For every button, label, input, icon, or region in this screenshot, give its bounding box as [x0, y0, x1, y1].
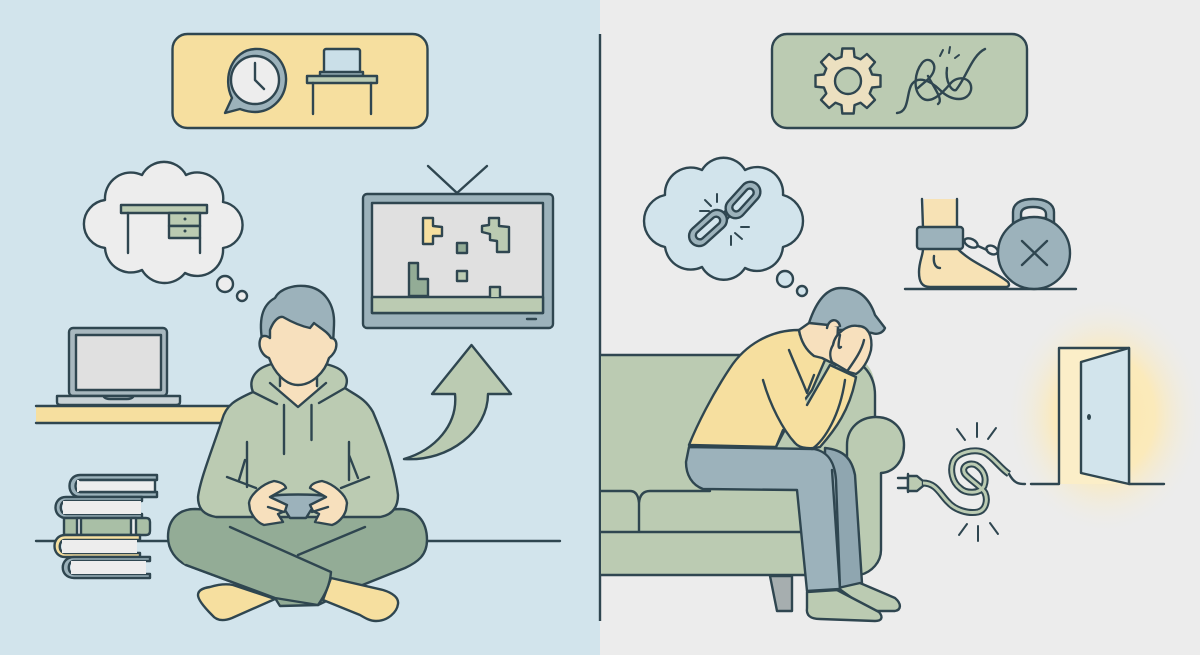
- face: [260, 317, 336, 385]
- sofa: [601, 355, 904, 611]
- icon: broken chain: [685, 178, 764, 250]
- panel: left background: [0, 0, 600, 655]
- laptop: [57, 328, 180, 405]
- sofa leg: [770, 576, 792, 611]
- panel: left scene: [36, 34, 560, 621]
- shelf: [36, 406, 231, 423]
- weight: [998, 199, 1070, 289]
- panel: right scene: [601, 34, 1200, 621]
- floor line: [36, 540, 560, 542]
- torso: [689, 330, 825, 447]
- foot: [919, 199, 1009, 287]
- back leg: [825, 448, 862, 590]
- hair: [261, 286, 334, 345]
- crossed legs: [168, 509, 427, 606]
- slumped person: [686, 288, 900, 621]
- thought cloud: desk: [84, 162, 247, 301]
- face: [799, 323, 838, 365]
- thought cloud: broken chain: [644, 158, 807, 296]
- header: gear and tangle: [772, 34, 1027, 128]
- ear: [827, 320, 840, 328]
- icon: desk in thought: [121, 205, 207, 253]
- hands: [249, 481, 347, 525]
- icon: clock speech bubble: [225, 49, 286, 113]
- glowing open door: [1005, 295, 1200, 535]
- front shin: [171, 527, 331, 605]
- hair: [809, 288, 885, 334]
- ground line: [905, 288, 1076, 290]
- hands: [830, 326, 871, 374]
- ankle chained to weight: [905, 199, 1076, 289]
- arrow pointing up to tv: [404, 345, 511, 459]
- front leg: [686, 447, 840, 591]
- icon: gear: [816, 48, 880, 114]
- hoodie: [198, 364, 398, 517]
- feet: [198, 578, 398, 621]
- chain: [963, 236, 999, 256]
- icon: tangled thread: [897, 47, 985, 113]
- controller: [272, 494, 326, 518]
- shoes: [807, 583, 900, 621]
- tv with game: [363, 166, 553, 328]
- book stack: [54, 475, 157, 578]
- person playing game: [168, 286, 427, 621]
- tangled cable and plug: [898, 423, 1025, 541]
- arm: [763, 350, 856, 448]
- sofa arm: [847, 417, 904, 475]
- divider line: [599, 34, 601, 621]
- icon: desk with laptop: [307, 49, 377, 114]
- panel: right background: [600, 0, 1200, 655]
- ankle cuff: [917, 227, 963, 249]
- header: clock and desk: [172, 34, 428, 128]
